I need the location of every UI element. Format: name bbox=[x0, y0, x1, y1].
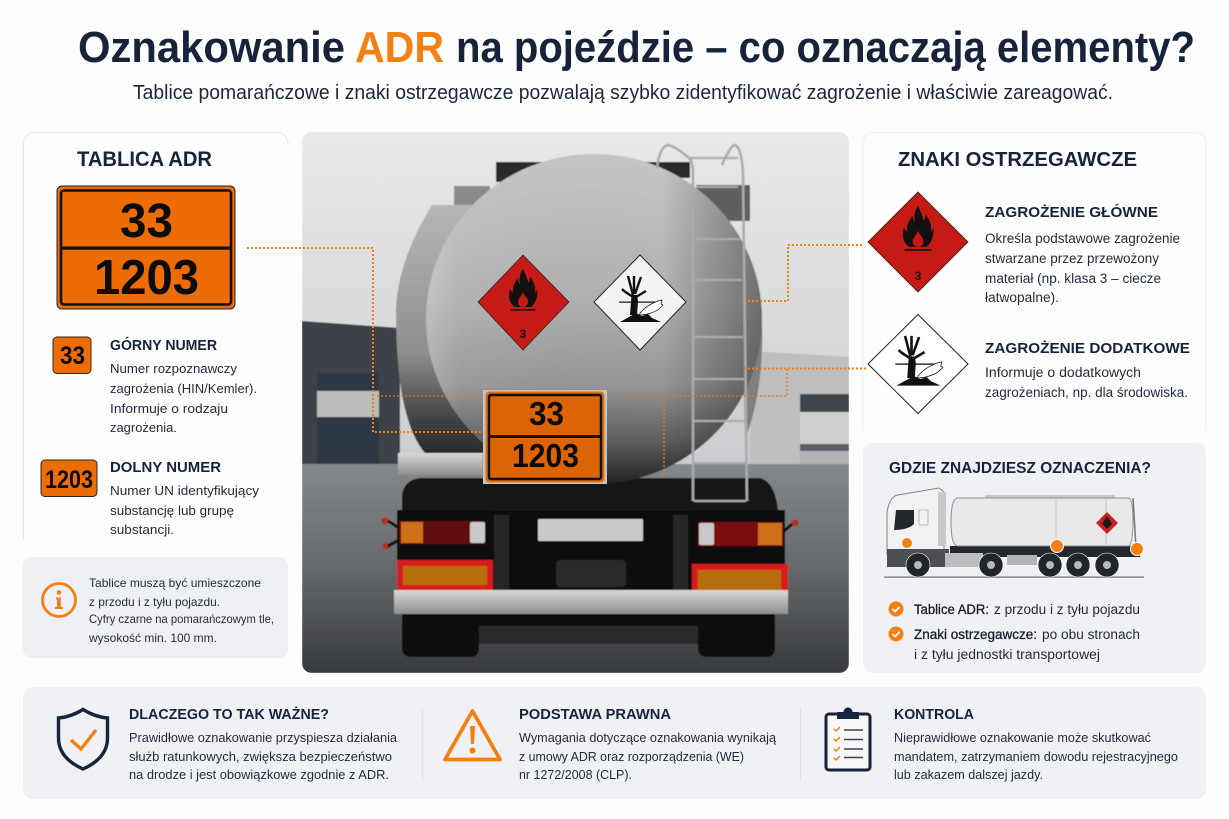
title bbox=[78, 23, 1195, 72]
list: lokalizacje: Znaki ostrzegawcze: bbox=[914, 627, 1037, 642]
bumper bbox=[394, 590, 788, 614]
text: zagrożenie główne: łatwopalne). bbox=[985, 290, 1059, 305]
block: górny numer bbox=[110, 336, 257, 435]
block: dolny numer: DOLNY NUMER bbox=[110, 460, 222, 476]
rear number plate bbox=[538, 519, 643, 541]
block: dlaczego to tak ważne: na drodze i jest obowiązkowe zgodnie z ADR. bbox=[129, 768, 389, 782]
wheels side bbox=[906, 553, 1119, 577]
connector: tablica do pojazdu bbox=[247, 248, 482, 432]
block: dlaczego to tak ważne bbox=[129, 706, 397, 782]
panel: stopka informacyjna bbox=[23, 687, 1206, 799]
title: ADR bbox=[355, 23, 444, 72]
connector: zagrożenie dodatkowe bbox=[743, 368, 866, 370]
location markers bbox=[902, 538, 1144, 556]
block: kontrola: mandatem, zatrzymaniem dowodu rejestracyjnego bbox=[894, 750, 1178, 764]
list: lokalizacje: po obu stronach bbox=[1042, 627, 1140, 642]
ground bbox=[302, 464, 849, 673]
text: zagrożenie dodatkowe bbox=[985, 340, 1190, 400]
ADR plate on tank: 33 bbox=[529, 395, 564, 432]
top equipment bbox=[454, 161, 750, 222]
photo: cysterna z tyłu bbox=[302, 132, 849, 673]
badge: 1203: 1203 bbox=[45, 466, 93, 494]
icon: info bbox=[42, 584, 76, 616]
ADR plate on tank: 1203 bbox=[512, 437, 579, 474]
block: kontrola: lub zakazem dalszej jazdy. bbox=[894, 768, 1043, 782]
large ADR plate: 1203 bbox=[94, 251, 199, 305]
callout: wymagania tablic: Cyfry czarne na pomarańczowym tle, bbox=[89, 612, 274, 626]
list: lokalizacje bbox=[888, 602, 1140, 662]
sign plate shelf bbox=[398, 453, 483, 475]
block: dlaczego to tak ważne: DLACZEGO TO TAK WAŻNE? bbox=[129, 706, 329, 723]
block: górny numer: zagrożenia. bbox=[110, 420, 177, 435]
list: lokalizacje: Tablice ADR: bbox=[914, 602, 989, 617]
text: zagrożenie główne bbox=[985, 203, 1180, 305]
ADR plate on tank bbox=[483, 390, 607, 484]
connector: zagrożenie główne bbox=[745, 245, 862, 301]
ladder bbox=[657, 145, 747, 501]
callout: wymagania tablic: z przodu i z tyłu pojazdu. bbox=[89, 595, 220, 609]
block: podstawa prawna: z umowy ADR oraz rozporządzenia (WE) bbox=[519, 750, 744, 764]
icon: shield bbox=[58, 710, 108, 769]
dotted artefacts on photo bbox=[377, 369, 787, 475]
reflectors bbox=[396, 559, 789, 590]
block: kontrola: KONTROLA bbox=[894, 707, 975, 723]
subtitle: Tablice pomarańczowe i znaki ostrzegawcze pozwalają szybko zidentyfikować zagrożenie i właściwie zareagować. bbox=[133, 82, 1113, 104]
block: kontrola bbox=[894, 707, 1178, 782]
block: dolny numer: substancji. bbox=[110, 522, 174, 537]
heading: tablica ADR: TABLICA ADR bbox=[77, 148, 212, 171]
block: podstawa prawna: Wymagania dotyczące oznakowania wynikają bbox=[519, 731, 776, 745]
heading: znaki ostrzegawcze: ZNAKI OSTRZEGAWCZE bbox=[898, 148, 1137, 171]
text: zagrożenie główne: stwarzane przez przewożony bbox=[985, 251, 1159, 266]
sign: zagrożenie główne: 3 bbox=[915, 269, 922, 283]
text: zagrożenie dodatkowe: ZAGROŻENIE DODATKOWE bbox=[985, 340, 1190, 357]
chassis bbox=[396, 509, 786, 590]
block: górny numer: Informuje o rodzaju bbox=[110, 401, 228, 416]
right building bbox=[750, 352, 849, 464]
badge: 33 bbox=[53, 337, 91, 374]
text: zagrożenie dodatkowe: zagrożeniach, np. dla środowiska. bbox=[985, 385, 1188, 400]
block: podstawa prawna: nr 1272/2008 (CLP). bbox=[519, 768, 632, 782]
block: dolny numer: substancję lub grupę bbox=[110, 503, 234, 518]
title: Oznakowanie bbox=[78, 23, 345, 72]
list: lokalizacje: i z tyłu jednostki transportowej bbox=[914, 647, 1100, 662]
sign on tank: flammable: 3 bbox=[520, 327, 527, 341]
block: kontrola: Nieprawidłowe oznakowanie może skutkować bbox=[894, 731, 1151, 745]
left building bbox=[302, 321, 400, 465]
block: dlaczego to tak ważne: Prawidłowe oznakowanie przyspiesza działania bbox=[129, 731, 397, 745]
tank rear section bbox=[396, 205, 490, 472]
text: zagrożenie główne: ZAGROŻENIE GŁÓWNE bbox=[985, 203, 1158, 221]
list: lokalizacje: z przodu i z tyłu pojazdu bbox=[994, 602, 1140, 617]
large ADR plate bbox=[57, 186, 235, 309]
block: podstawa prawna: PODSTAWA PRAWNA bbox=[519, 707, 672, 723]
icon: warning bbox=[445, 711, 500, 760]
sign: zagrożenie dodatkowe bbox=[868, 314, 968, 414]
large ADR plate: 33 bbox=[120, 195, 173, 248]
block: podstawa prawna bbox=[519, 707, 776, 782]
block: dlaczego to tak ważne: służb ratunkowych, zwiększa bezpieczeństwo bbox=[129, 750, 392, 764]
text: zagrożenie główne: materiał (np. klasa 3 – ciecze bbox=[985, 271, 1161, 286]
badge: 33: 33 bbox=[60, 342, 85, 370]
right lights bbox=[698, 520, 798, 546]
heading: gdzie znajdziesz: GDZIE ZNAJDZIESZ OZNACZENIA? bbox=[889, 460, 1151, 477]
block: dolny numer: Numer UN identyfikujący bbox=[110, 483, 260, 498]
left lights bbox=[382, 518, 485, 550]
block: dolny numer bbox=[110, 460, 260, 537]
text: zagrożenie główne: Określa podstawowe zagrożenie bbox=[985, 231, 1180, 246]
sign: zagrożenie główne bbox=[868, 192, 968, 292]
callout: wymagania tablic: wysokość min. 100 mm. bbox=[88, 631, 217, 645]
text: zagrożenie dodatkowe: Informuje o dodatkowych bbox=[985, 365, 1141, 380]
panel: tablica ADR bbox=[23, 132, 288, 540]
wheel hubs bbox=[913, 560, 1112, 570]
wheels bbox=[402, 478, 778, 657]
badge: 1203 bbox=[41, 460, 97, 496]
panel: gdzie znajdziesz oznaczenia bbox=[863, 443, 1206, 673]
callout: wymagania tablic bbox=[23, 557, 288, 658]
icon: clipboard bbox=[826, 708, 870, 770]
sign on tank: environment bbox=[594, 255, 686, 350]
callout: wymagania tablic: Tablice muszą być umieszczone bbox=[89, 576, 261, 590]
panel: znaki ostrzegawcze bbox=[863, 132, 1206, 430]
block: górny numer: Numer rozpoznawczy bbox=[110, 361, 237, 376]
sign on tank: flammable bbox=[478, 255, 569, 350]
block: górny numer: zagrożenia (HIN/Kemler). bbox=[110, 381, 257, 396]
tank head bbox=[426, 154, 762, 484]
illustration: cysterna z boku bbox=[884, 488, 1144, 578]
block: górny numer: GÓRNY NUMER bbox=[110, 336, 218, 354]
